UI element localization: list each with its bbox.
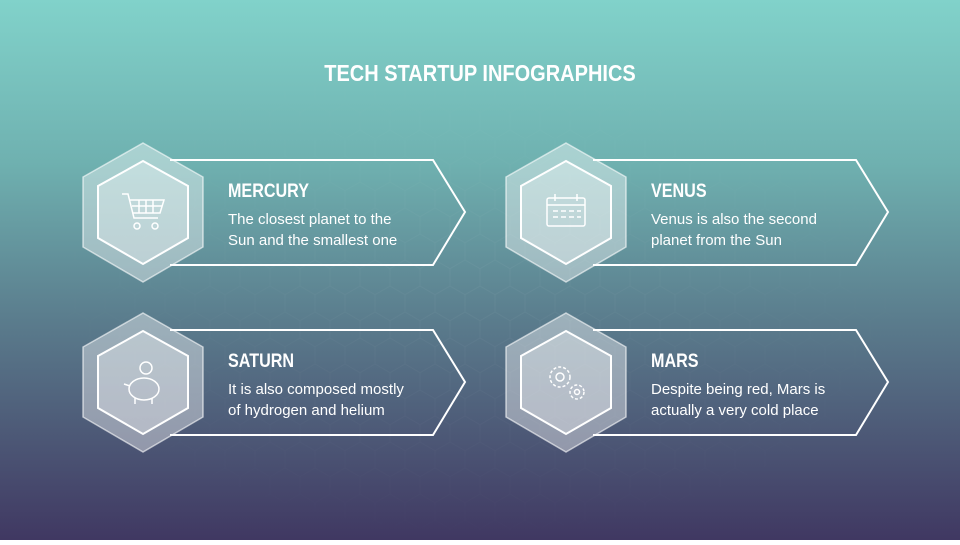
text: mars: Despite being red, Mars is — [651, 381, 825, 398]
card: mars — [506, 313, 888, 452]
heading: saturn: SATURN — [228, 350, 294, 371]
text: mercury: Sun and the smallest one — [228, 232, 397, 249]
heading: venus: VENUS — [651, 180, 707, 201]
heading: mars: MARS — [651, 350, 699, 371]
icon hexagon: piggy bank — [83, 313, 203, 452]
card: saturn — [83, 313, 465, 452]
text: venus: Venus is also the second — [651, 211, 817, 228]
card: mercury — [83, 143, 465, 282]
icon hexagon: gears — [506, 313, 626, 452]
icon hexagon: calendar — [506, 143, 626, 282]
text: saturn: It is also composed mostly — [228, 381, 404, 398]
heading: mercury: MERCURY — [228, 180, 309, 201]
title: TECH STARTUP INFOGRAPHICS — [324, 60, 636, 86]
text: venus: planet from the Sun — [651, 232, 782, 249]
card: venus — [506, 143, 888, 282]
text: mercury: The closest planet to the — [228, 211, 391, 228]
text: mars: actually a very cold place — [651, 402, 819, 419]
text: saturn: of hydrogen and helium — [228, 402, 385, 419]
icon hexagon: cart — [83, 143, 203, 282]
